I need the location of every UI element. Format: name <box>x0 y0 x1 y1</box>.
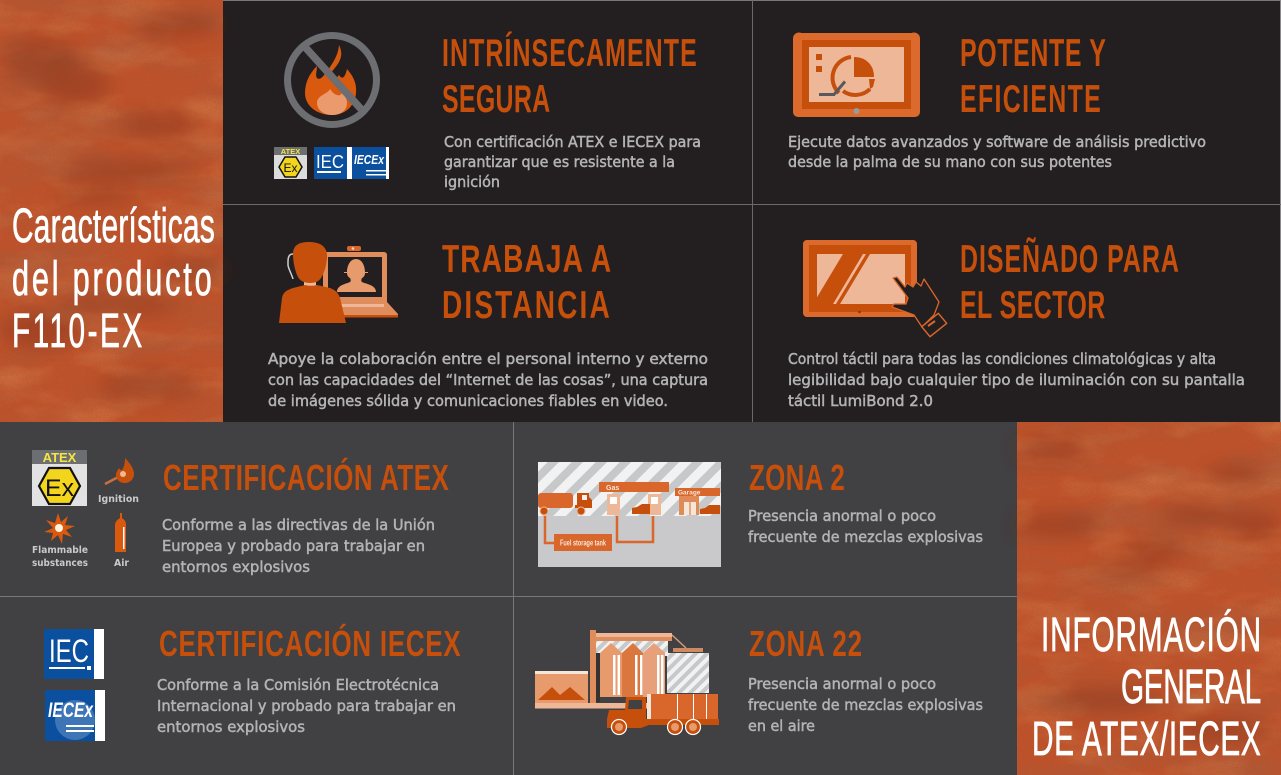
icon: ATEX badge large <box>32 450 87 506</box>
text: powerful description: Ejecute datos avanzados y software de análisis predictivo <box>788 133 1206 151</box>
text: powerful description <box>788 133 1206 171</box>
heading: intrinsically safe: INTRÍNSECAMENTE <box>442 30 697 74</box>
text: ATEX description: Europea y probado para trabajar en <box>162 537 425 555</box>
heading: work remotely: TRABAJA A <box>442 238 611 281</box>
text: zone 22 description: en el aire <box>748 717 815 735</box>
illustration: zone 22 silos and truck <box>535 630 719 734</box>
heading: intrinsically safe: SEGURA <box>442 76 550 120</box>
text: zone 2 description: frecuente de mezclas explosivas <box>748 528 983 546</box>
text: ATEX description: entornos explosivos <box>162 558 310 576</box>
icon: ATEX badge large: ATEX <box>43 450 77 465</box>
text: zone 2 description <box>748 507 983 546</box>
text: designed description: Control táctil para todas las condiciones climatológicas y alta <box>788 350 1216 368</box>
text: designed description <box>788 350 1245 410</box>
panel: product features background <box>223 0 1281 422</box>
heading: designed for the sector: EL SECTOR <box>960 282 1105 326</box>
icon: ignition match <box>98 458 139 505</box>
text: designed description: legibilidad bajo cualquier tipo de iluminación con su pantalla <box>788 371 1245 389</box>
heading: powerful and efficient: EFICIENTE <box>960 76 1101 120</box>
text: zone 22 description: frecuente de mezclas explosivas <box>748 696 983 714</box>
label: air: Air <box>114 558 129 569</box>
text: IECEx description <box>157 676 456 736</box>
text: zone 22 description: Presencia anormal o poco <box>748 675 936 693</box>
text: zone 2 description: Presencia anormal o poco <box>748 507 936 525</box>
label: flammable substances: Flammable <box>32 545 88 556</box>
heading: powerful and efficient <box>960 30 1106 120</box>
icon: no fire <box>288 36 376 124</box>
heading: product features: del producto <box>12 252 212 306</box>
panel: textured left banner <box>0 0 225 422</box>
text: ATEX description: Conforme a las directivas de la Unión <box>162 516 435 534</box>
heading: product features <box>12 200 215 358</box>
heading: product features: F110-EX <box>12 305 142 358</box>
heading: zone 2: ZONA 2 <box>749 458 845 498</box>
text: intrinsically safe description: ignición <box>444 173 500 191</box>
heading: designed for the sector <box>960 236 1179 326</box>
icon: remote video call <box>279 242 398 323</box>
fuel storage tank label: Fuel storage tank <box>560 538 606 548</box>
heading: intrinsically safe <box>442 30 697 120</box>
heading: work remotely <box>442 238 611 327</box>
icon: flammable substances spark <box>32 513 88 569</box>
text: intrinsically safe description: Con certificación ATEX e IECEX para <box>444 133 701 151</box>
text: powerful description: desde la palma de su mano con sus potentes <box>788 153 1112 171</box>
icon: ATEX badge small <box>274 147 307 179</box>
garage <box>675 488 720 515</box>
gas station <box>599 482 669 515</box>
heading: IECEx certification: CERTIFICACIÓN IECEX <box>159 623 461 664</box>
heading: designed for the sector: DISEÑADO PARA <box>960 236 1179 280</box>
icon: air cylinder <box>114 513 129 569</box>
heading: ATEX/IECEx overview: GENERAL <box>1121 661 1261 714</box>
gas station: Gas <box>606 485 619 492</box>
icon: IEC badge large: IEC <box>49 633 89 669</box>
icon: ATEX badge large: Ex <box>45 475 74 502</box>
icon: ATEX badge small: Ex <box>283 161 298 175</box>
label: ignition: Ignition <box>98 494 139 505</box>
garage: Garage <box>678 490 701 496</box>
text: IECEx description: Internacional y probado para trabajar en <box>157 697 456 715</box>
icon: IEC and IECEx badges small: IECEx <box>354 152 385 167</box>
icon: rugged tablet with chart <box>793 32 920 117</box>
text: work remotely description: con las capacidades del “Internet de las cosas”, una captura <box>268 371 708 389</box>
icon: IECEx badge large: IECEx <box>48 699 94 722</box>
text: intrinsically safe description: garantizar que es resistente a la <box>444 153 675 171</box>
text: work remotely description: Apoye la colaboración entre el personal interno y externo <box>268 350 708 368</box>
label: flammable substances: substances <box>32 558 88 569</box>
heading: product features: Características <box>12 200 215 253</box>
heading: zone 22: ZONA 22 <box>749 624 862 664</box>
panel: ATEX/IECEx overview background <box>0 422 1017 775</box>
heading: work remotely: DISTANCIA <box>442 284 610 327</box>
tanker truck <box>538 493 592 515</box>
panel: textured right banner <box>1015 422 1281 775</box>
heading: ATEX certification: CERTIFICACIÓN ATEX <box>163 457 449 498</box>
heading: ATEX/IECEx overview <box>1032 608 1261 766</box>
icon: IEC badge large <box>44 629 104 679</box>
text: IECEx description: entornos explosivos <box>157 718 305 736</box>
illustration: zone 2 fuel station <box>538 462 721 567</box>
heading: powerful and efficient: POTENTE Y <box>960 30 1106 74</box>
icon: ATEX badge small: ATEX <box>281 147 300 156</box>
text: designed description: táctil LumiBond 2.0 <box>788 392 933 410</box>
heading: ATEX/IECEx overview: INFORMACIÓN <box>1041 608 1261 662</box>
text: zone 22 description <box>748 675 983 735</box>
label: flammable substances <box>32 545 88 569</box>
text: intrinsically safe description <box>444 133 701 191</box>
heading: ATEX/IECEx overview: DE ATEX/IECEX <box>1032 713 1261 766</box>
icon: IEC and IECEx badges small: IEC <box>316 152 344 172</box>
text: ATEX description <box>162 516 435 576</box>
text: IECEx description: Conforme a la Comisión Electrotécnica <box>157 676 439 694</box>
text: work remotely description <box>268 350 708 410</box>
fuel storage tank label <box>554 534 612 551</box>
text: work remotely description: de imágenes sólida y comunicaciones fiables en video. <box>268 392 668 410</box>
icon: IEC and IECEx badges small <box>314 147 389 179</box>
icon: touchscreen tablet with hand <box>803 240 947 337</box>
icon: IECEx badge large <box>45 690 105 741</box>
